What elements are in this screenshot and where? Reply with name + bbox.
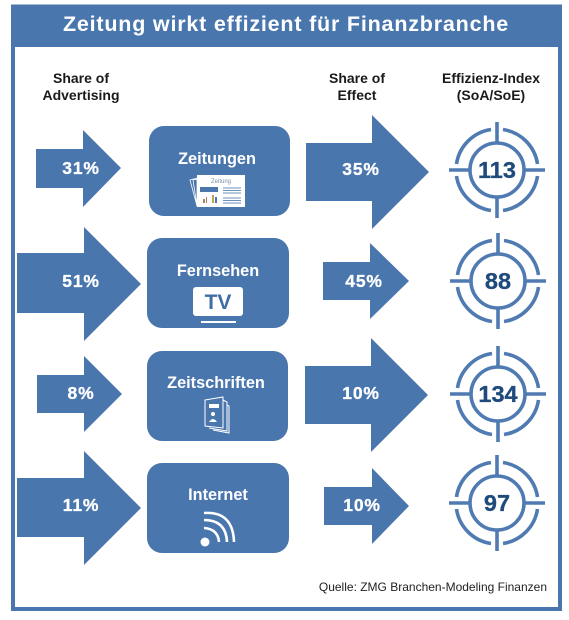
icon: newspaper — [190, 175, 245, 207]
arrow: Zeitungen share of advertising 31% — [36, 130, 121, 207]
icon: newspaper: Zeitung — [211, 179, 231, 185]
title: Zeitung wirkt effizient für Finanzbranche — [63, 12, 509, 36]
column heading: share of effect: Effect — [338, 87, 377, 103]
panel: Zeitschriften — [147, 351, 288, 441]
panel: Zeitschriften: Zeitschriften — [167, 374, 265, 392]
target: Fernsehen index 88: 88 — [485, 268, 511, 294]
arrow: Internet share of effect 10% — [324, 468, 409, 544]
column heading: efficiency index: (SoA/SoE) — [457, 87, 525, 103]
panel: Internet — [147, 463, 289, 553]
arrow: Zeitschriften share of advertising 8% — [37, 356, 122, 432]
arrow: Fernsehen share of advertising 51% — [17, 227, 141, 341]
column heading: share of advertising: Share of — [53, 70, 109, 86]
arrow: Zeitschriften share of effect 10% — [305, 338, 428, 452]
panel: Fernsehen — [147, 238, 289, 328]
arrow: Internet share of advertising 11% — [17, 451, 141, 565]
icon: TV — [193, 287, 243, 323]
panel: Zeitungen — [149, 126, 290, 216]
arrow: Fernsehen share of effect 45% — [323, 243, 409, 319]
target: Zeitschriften index 134 — [450, 346, 546, 442]
column heading: efficiency index: Effizienz-Index — [442, 70, 540, 86]
target: Internet index 97: 97 — [484, 490, 510, 516]
arrow: Internet share of effect 10%: 10% — [343, 495, 381, 515]
arrow: Zeitungen share of effect 35% — [306, 115, 429, 229]
column heading: share of advertising: Advertising — [42, 87, 120, 103]
column heading: share of effect: Share of — [329, 70, 385, 86]
target: Zeitungen index 113: 113 — [478, 157, 516, 183]
arrow: Zeitschriften share of advertising 8%: 8% — [68, 383, 94, 403]
arrow: Fernsehen share of advertising 51%: 51% — [62, 271, 100, 291]
arrow: Fernsehen share of effect 45%: 45% — [345, 271, 383, 291]
icon: TV: TV — [205, 291, 231, 314]
target: Zeitschriften index 134: 134 — [478, 381, 518, 407]
target: Fernsehen index 88 — [450, 233, 546, 329]
panel: Internet: Internet — [188, 486, 248, 504]
source note: Quelle: ZMG Branchen-Modeling Finanzen — [319, 580, 547, 594]
icon: wifi — [200, 513, 234, 546]
arrow: Zeitungen share of advertising 31%: 31% — [62, 158, 100, 178]
panel: Zeitungen: Zeitungen — [178, 150, 256, 168]
arrow: Zeitungen share of effect 35%: 35% — [342, 159, 380, 179]
arrow: Zeitschriften share of effect 10%: 10% — [342, 383, 380, 403]
panel: Fernsehen: Fernsehen — [177, 262, 259, 280]
target: Zeitungen index 113 — [449, 122, 545, 218]
icon: magazines — [205, 397, 229, 433]
header bar — [11, 5, 562, 47]
target: Internet index 97 — [449, 455, 545, 551]
arrow: Internet share of advertising 11%: 11% — [63, 495, 99, 515]
